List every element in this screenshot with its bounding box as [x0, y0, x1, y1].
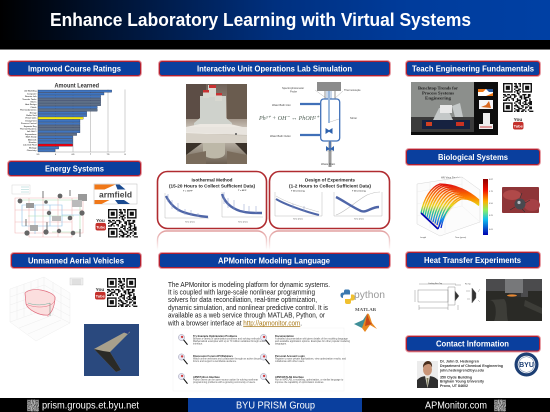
resource: matlab interface: APM MATLAB Interface [275, 375, 304, 379]
bar chart: amount learned: Fluids [31, 107, 37, 109]
reaction equation: Ph³⁺ + OH⁻ ↔ PhOH²⁺ [258, 115, 319, 122]
chart: isothermal left: Time (min) [238, 222, 248, 224]
icon: youtube [95, 287, 106, 300]
bar chart: amount learned: Thermodynamics [20, 110, 37, 112]
logo: BYU seal: BYU [519, 362, 534, 369]
logo: armfield: armfield [99, 190, 132, 200]
bar chart: amount learned: Thermal Systems [20, 128, 37, 130]
heading: biological systems: Biological Systems [438, 152, 508, 162]
footer link: apmonitor: APMonitor.com [425, 400, 487, 412]
logo: python: python [354, 289, 385, 301]
chart: isothermal left: Time (min) [185, 222, 195, 224]
panel: contact information [406, 336, 540, 388]
reactor photo [186, 84, 247, 164]
bar chart: amount learned: 7.5 [107, 154, 110, 156]
3D surface plot: Time (years) [455, 237, 466, 239]
bar chart: amount learned: Biology [29, 147, 37, 149]
panel: heat transfer experiments [406, 252, 542, 321]
bar chart: amount learned [20, 84, 126, 156]
contact details [439, 360, 503, 388]
resource: documentation [260, 334, 351, 346]
video thumbnail: Engineering [425, 96, 452, 100]
bar chart: amount learned: Math Study [26, 136, 37, 139]
heading: contact information: Contact Information [436, 338, 509, 348]
text block: description: dynamic simulation, and nonlinear predictive control. It is [168, 303, 328, 312]
bar chart: amount learned: Materials [28, 138, 37, 141]
reactor schematic: Probe [290, 90, 297, 94]
bar chart: amount learned: Transfer Tanks [22, 99, 37, 101]
logo: matlab: MATLAB [355, 307, 376, 312]
colorbar: 0.50 [489, 203, 494, 205]
bar chart: amount learned: 6 [55, 154, 57, 156]
icon: youtube [513, 117, 524, 130]
text block: description: solvers for data reconciliation, real-time optimization, [168, 295, 317, 304]
heading: apmonitor modeling language: APMonitor Modeling Language [218, 255, 330, 265]
resource: documentation: A detailed documentation wiki gives details of the modeling language [275, 338, 348, 340]
bar chart: amount learned: 7 [90, 154, 92, 156]
panel: teach engineering fundamentals [406, 61, 540, 135]
heading: teach engineering fundamentals: Teach Engineering Fundamentals [412, 63, 534, 73]
bar chart: amount learned: Energy [30, 112, 37, 114]
resource: example problems: Mathematical examples with up to 70 million variables through a web [193, 340, 266, 343]
panel: isothermal method: Isothermal Method [192, 178, 233, 182]
contact details: john.hedengren@byu.edu [439, 368, 484, 372]
contact details: Provo, UT 84602 [440, 384, 468, 388]
bar chart: amount learned: Separate Eng [24, 125, 37, 128]
reactor schematic: Water Bath Outlet [270, 134, 291, 138]
footer [0, 398, 550, 412]
flame test photo [486, 279, 542, 321]
panel: design of experiments [270, 172, 390, 250]
resource: discussion forum: forum and support a worldwide audience. [193, 360, 237, 363]
panel: design of experiments: (1-2 Hours to Collect Sufficient Data) [289, 184, 372, 188]
UAV photo [84, 324, 139, 376]
reactor schematic: Spectrophotometer [282, 86, 304, 90]
reactor schematic: Stirrer [350, 116, 357, 120]
chart: design left: Time (min) [354, 218, 364, 220]
video thumbnail [411, 82, 498, 135]
resource: documentation: and available application options. Examples for other popular modeling [275, 340, 351, 343]
resource: account login: Register to save private applications, view optimization results, and [275, 358, 347, 360]
chart: isothermal left: T = 110°F [183, 190, 193, 192]
title banner [0, 0, 550, 50]
text block: description: with a browser interface at http://apmonitor.com. [167, 318, 302, 327]
footer QR left [27, 400, 40, 411]
bar chart: amount learned: Design Unit [25, 119, 37, 122]
3D surface plot: Length [420, 236, 426, 239]
panel: isothermal method: (15-20 Hours to Collect Sufficient Data) [169, 184, 256, 188]
resource: account login [260, 354, 347, 364]
bar chart: amount learned: Amount Learned [54, 84, 99, 90]
virus cell image [502, 187, 540, 213]
panel: apmonitor modeling language [159, 253, 390, 391]
video thumbnail: Benchtop Trends for [418, 86, 458, 90]
panel: apmonitor resources [173, 328, 351, 391]
chart: isothermal right: T = 60°F [238, 190, 247, 192]
3D flight path plot [10, 277, 83, 341]
3D surface plot [417, 176, 480, 239]
reactor schematic [270, 82, 361, 167]
heading: heat transfer experiments: Heat Transfer Experiments [424, 255, 521, 265]
contact details: Department of Chemical Engineering [440, 364, 503, 368]
panel: improved course ratings [8, 61, 141, 156]
flowsheet diagram [12, 185, 87, 237]
text block: description: The APMonitor is modeling platform for dynamic systems. [168, 280, 330, 289]
footer label: BYU PRISM Group: BYU PRISM Group [236, 400, 316, 412]
heading: interactive simulation [159, 61, 390, 76]
resource: matlab interface: Run in MATLAB, a modeling, optimization, or similar language to [275, 378, 344, 382]
icon: youtube [96, 218, 106, 230]
bar chart: amount learned: Boiler Unit [26, 114, 37, 117]
colorbar: 0.05 [489, 229, 494, 231]
bar chart: amount learned: Air Modeling [24, 90, 37, 93]
title: Enhance Laboratory Learning with Virtual Systems [50, 9, 471, 30]
QR code [108, 209, 138, 238]
video thumbnail: Process Systems [422, 90, 454, 96]
heat sink drawing: Cooling Fins Top [428, 283, 442, 285]
colorbar [483, 179, 494, 235]
text block: description: available as a web service through MATLAB, Python, or [168, 311, 326, 320]
resource: python interface: programming problems with a growing community of users. [193, 381, 256, 384]
chart: design left: T Decreasing [291, 190, 305, 192]
portrait [417, 361, 438, 388]
resource: matlab interface [260, 373, 344, 384]
bar chart: amount learned: Heat Design [25, 103, 37, 106]
resource: account login: collaborate with other users. [275, 360, 305, 363]
QR code [107, 278, 137, 307]
bar chart: amount learned: Lab Unit 1 [27, 130, 37, 133]
bar chart: amount learned: 6.5 [72, 154, 75, 156]
bar chart: amount learned: Chemistry [27, 149, 37, 152]
heat sink drawing [415, 283, 480, 310]
bar chart: amount learned: Process Control [21, 122, 37, 125]
footer QR right [494, 400, 507, 411]
resource: example problems: interface. [193, 342, 203, 346]
bar chart: amount learned: Valves [30, 102, 37, 104]
panel: interactive unit operations lab simulation [158, 61, 390, 250]
resource: python interface: APM Python Interface [193, 375, 220, 379]
contact details: Dr. John D. Hedengren [440, 360, 479, 364]
panel: isothermal method [158, 172, 266, 250]
resource: documentation: Documentation [275, 334, 294, 338]
bar chart: amount learned: 8 [124, 154, 126, 156]
panel: unmanned aerial vehicles [10, 253, 141, 376]
bar chart: amount learned: 5.5 [37, 154, 40, 156]
reactor schematic: Thermocouple [344, 88, 361, 92]
resource: discussion forum: Watch online webinars and collaborate through an active discussion [193, 358, 265, 360]
heading: interactive simulation: Interactive Unit Operations Lab Simulation [197, 63, 352, 73]
colorbar: 0.75 [489, 191, 494, 193]
contact details: Brigham Young University [440, 380, 484, 384]
colorbar: 0.87 [489, 179, 494, 181]
bar chart: amount learned: Separations [25, 133, 37, 136]
heat sink drawing: Fin Tip [465, 284, 471, 286]
logo: matlab [354, 307, 377, 332]
reactor schematic: Water Bath Inlet [272, 103, 291, 107]
text block: description: It is coupled with large-scale nonlinear programming [168, 288, 315, 296]
chart: isothermal left [165, 190, 263, 224]
heading: unmanned aerial vehicles: Unmanned Aerial Vehicles [28, 255, 124, 265]
footer link: prism group: prism.groups.et.byu.net [42, 400, 139, 412]
QR code [503, 83, 533, 112]
logo: python [340, 289, 385, 304]
heading: energy systems: Energy Systems [45, 163, 104, 173]
resource: discussion forum: Discussion Forum API Webinars [193, 354, 233, 358]
bar chart: amount learned: Virtual Labs [25, 117, 37, 120]
resource: documentation: languages. [275, 342, 287, 346]
colorbar: 0.25 [489, 215, 494, 217]
reactor schematic: Waste Drain [321, 162, 336, 166]
panel: energy systems [8, 161, 141, 238]
resource: matlab interface: improve the capability of optimization routines. [275, 381, 324, 384]
resource: example problems [178, 334, 266, 346]
chart: design left: Time (min) [293, 218, 303, 220]
bar chart: amount learned: Computer [27, 92, 37, 95]
panel: biological systems [406, 149, 540, 239]
resource: python interface: Python users can be open-source option for solving nonlinear [193, 378, 258, 382]
bar chart: amount learned: Lab Unit Fluid [23, 144, 37, 147]
chart: design right: T Decreasing [352, 190, 366, 192]
resource: example problems: Browse a variety of optimization problems and solving methods. [193, 338, 261, 340]
resource: account login: Personal Account Login [275, 354, 305, 358]
bar chart: amount learned: Reactor Lab [25, 95, 37, 98]
panel: design of experiments: Design of Experiments [305, 178, 356, 182]
text block: description [167, 280, 330, 327]
chart: design left [275, 190, 382, 220]
resource: python interface [178, 373, 258, 384]
heading: apmonitor modeling language [159, 253, 390, 268]
heading: improved course ratings: Improved Course Ratings [28, 63, 121, 73]
resource: discussion forum [178, 354, 265, 364]
bar chart: amount learned: Kinetics [29, 141, 37, 144]
resource: example problems: Try Example Optimization Problems [193, 334, 238, 338]
3D surface plot: HIV Virus Simulation [441, 176, 464, 180]
contact details: 350 Clyde Building [440, 376, 472, 380]
